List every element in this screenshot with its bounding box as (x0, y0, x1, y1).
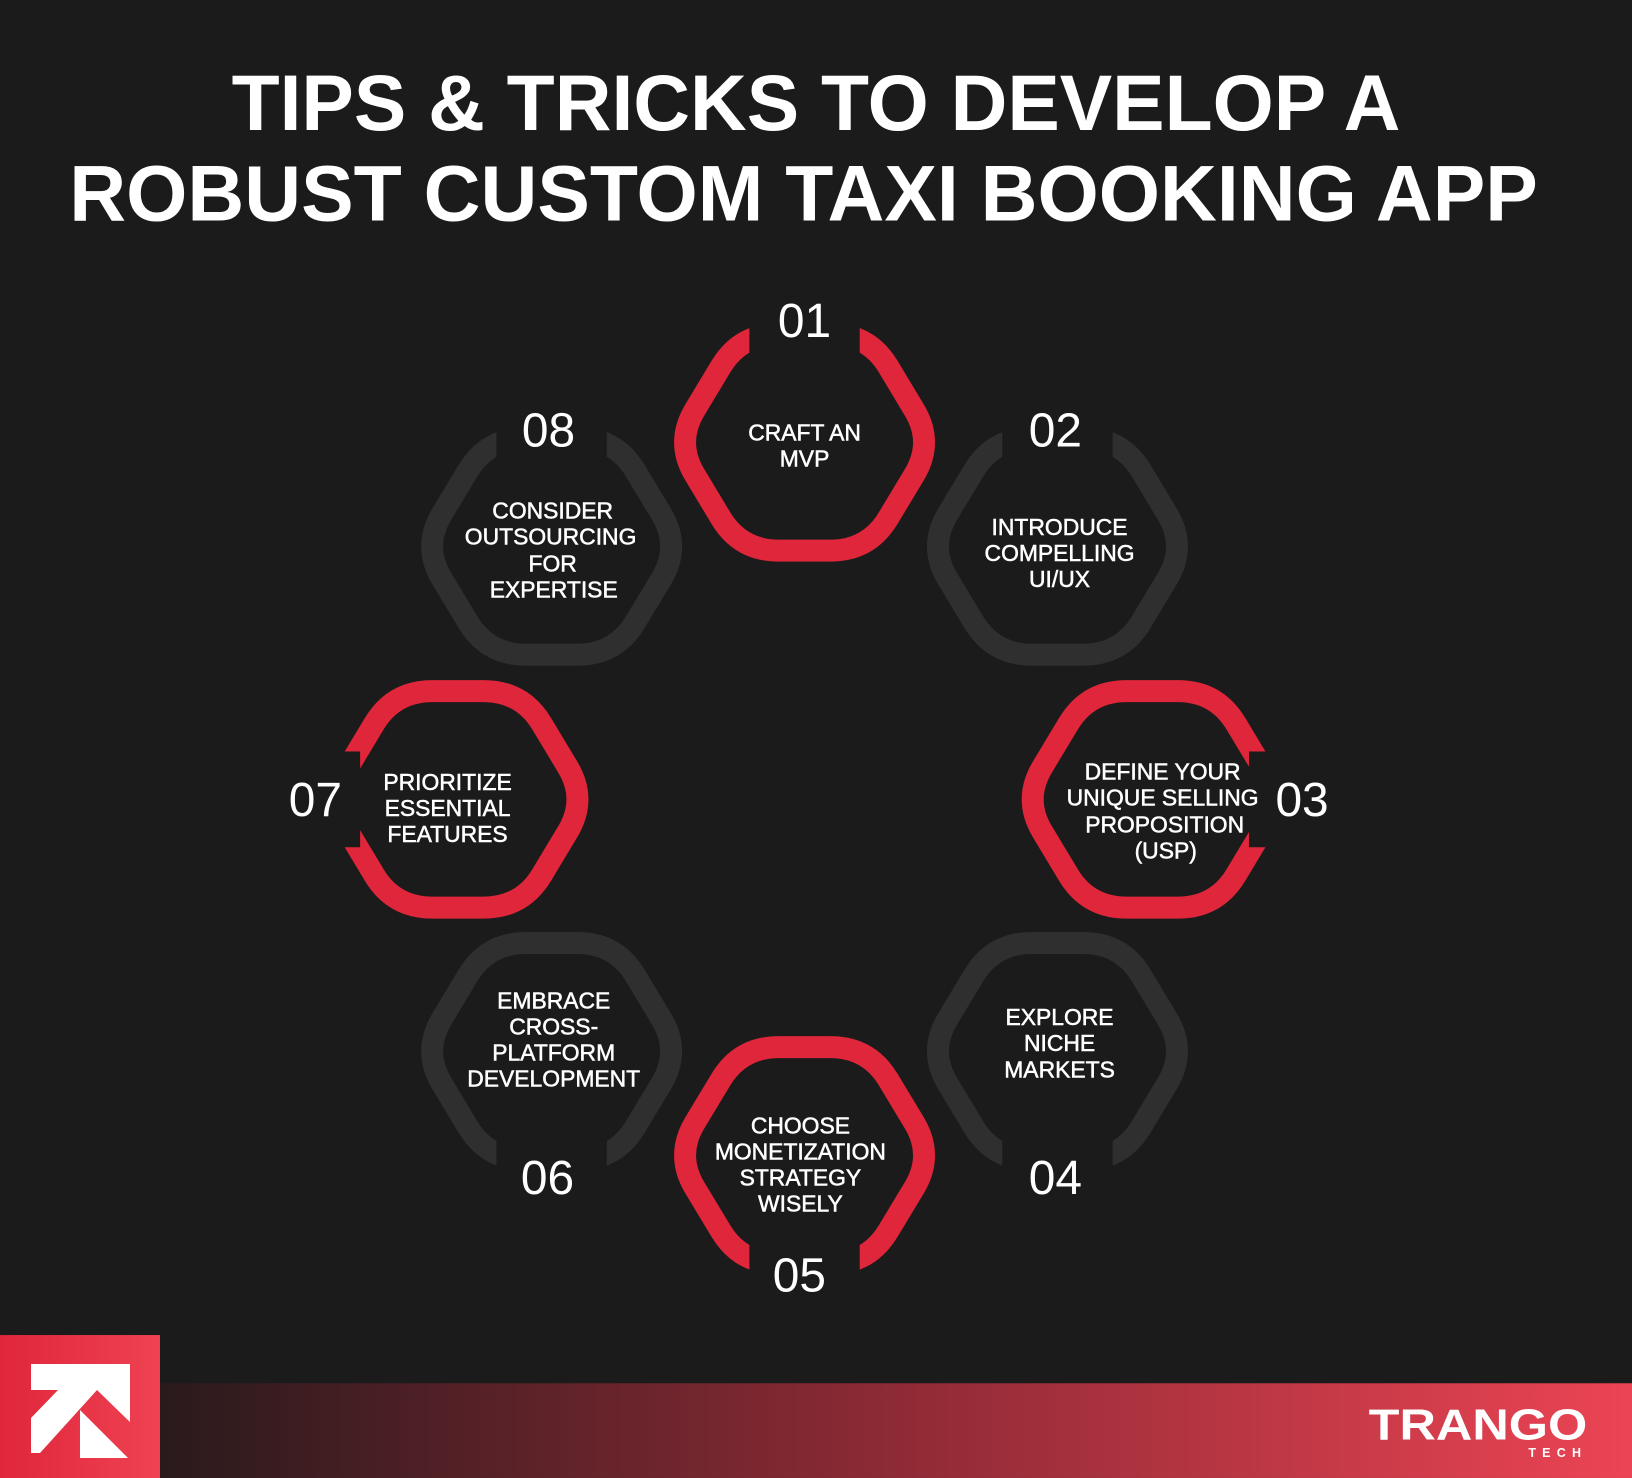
title: ROBUST CUSTOM TAXI BOOKING APP (69, 149, 1538, 238)
step 06: CROSS- (509, 1014, 598, 1040)
step 01: CRAFT AN (748, 419, 861, 445)
step 03: UNIQUE SELLING (1067, 785, 1259, 811)
brand name: TRANGO (1369, 1400, 1587, 1449)
step 02 (938, 401, 1177, 655)
step 04: MARKETS (1004, 1056, 1115, 1082)
step 05: 05 (773, 1250, 826, 1303)
step 05: CHOOSE (751, 1112, 850, 1138)
footer bar (159, 1383, 1632, 1478)
step 02: COMPELLING (985, 540, 1135, 566)
step 08: FOR (529, 550, 577, 576)
step 07: 07 (289, 774, 342, 827)
step 02: 02 (1029, 405, 1082, 458)
step 03: DEFINE YOUR (1085, 759, 1241, 785)
step 08: OUTSOURCING (465, 523, 636, 549)
step 05: MONETIZATION (715, 1138, 886, 1164)
step 04 (938, 943, 1177, 1205)
step 07: PRIORITIZE (383, 769, 512, 795)
step 05: STRATEGY (740, 1165, 861, 1191)
step 06: EMBRACE (497, 988, 610, 1014)
title (69, 58, 1538, 238)
step 05: WISELY (758, 1191, 843, 1217)
title: TIPS & TRICKS TO DEVELOP A (232, 58, 1400, 147)
step 01: MVP (780, 445, 829, 471)
icon: arrow logo (31, 1364, 130, 1458)
step 07: FEATURES (387, 821, 508, 847)
brand name: TECH (1528, 1446, 1587, 1460)
step 06: 06 (521, 1152, 574, 1205)
step 01: 01 (778, 295, 831, 348)
step 01 (685, 295, 924, 551)
step 08: EXPERTISE (490, 576, 618, 602)
step 06: PLATFORM (492, 1040, 615, 1066)
logo box (0, 1335, 160, 1478)
step 04: EXPLORE (1006, 1004, 1114, 1030)
step 03 (1033, 691, 1329, 908)
step 07 (289, 691, 577, 908)
step 04: NICHE (1024, 1030, 1095, 1056)
step 08: CONSIDER (492, 497, 613, 523)
step 03: (USP) (1135, 838, 1197, 864)
step 08 (432, 401, 671, 655)
step 03: 03 (1275, 774, 1329, 827)
step 07: ESSENTIAL (385, 795, 510, 821)
step 05 (685, 1047, 924, 1306)
step 06: DEVELOPMENT (467, 1066, 640, 1092)
step 03: PROPOSITION (1085, 812, 1244, 838)
step 02: INTRODUCE (992, 514, 1128, 540)
step 04: 04 (1029, 1152, 1082, 1205)
step 02: UI/UX (1029, 566, 1090, 592)
step 08: 08 (522, 405, 575, 458)
step 06 (432, 943, 671, 1205)
